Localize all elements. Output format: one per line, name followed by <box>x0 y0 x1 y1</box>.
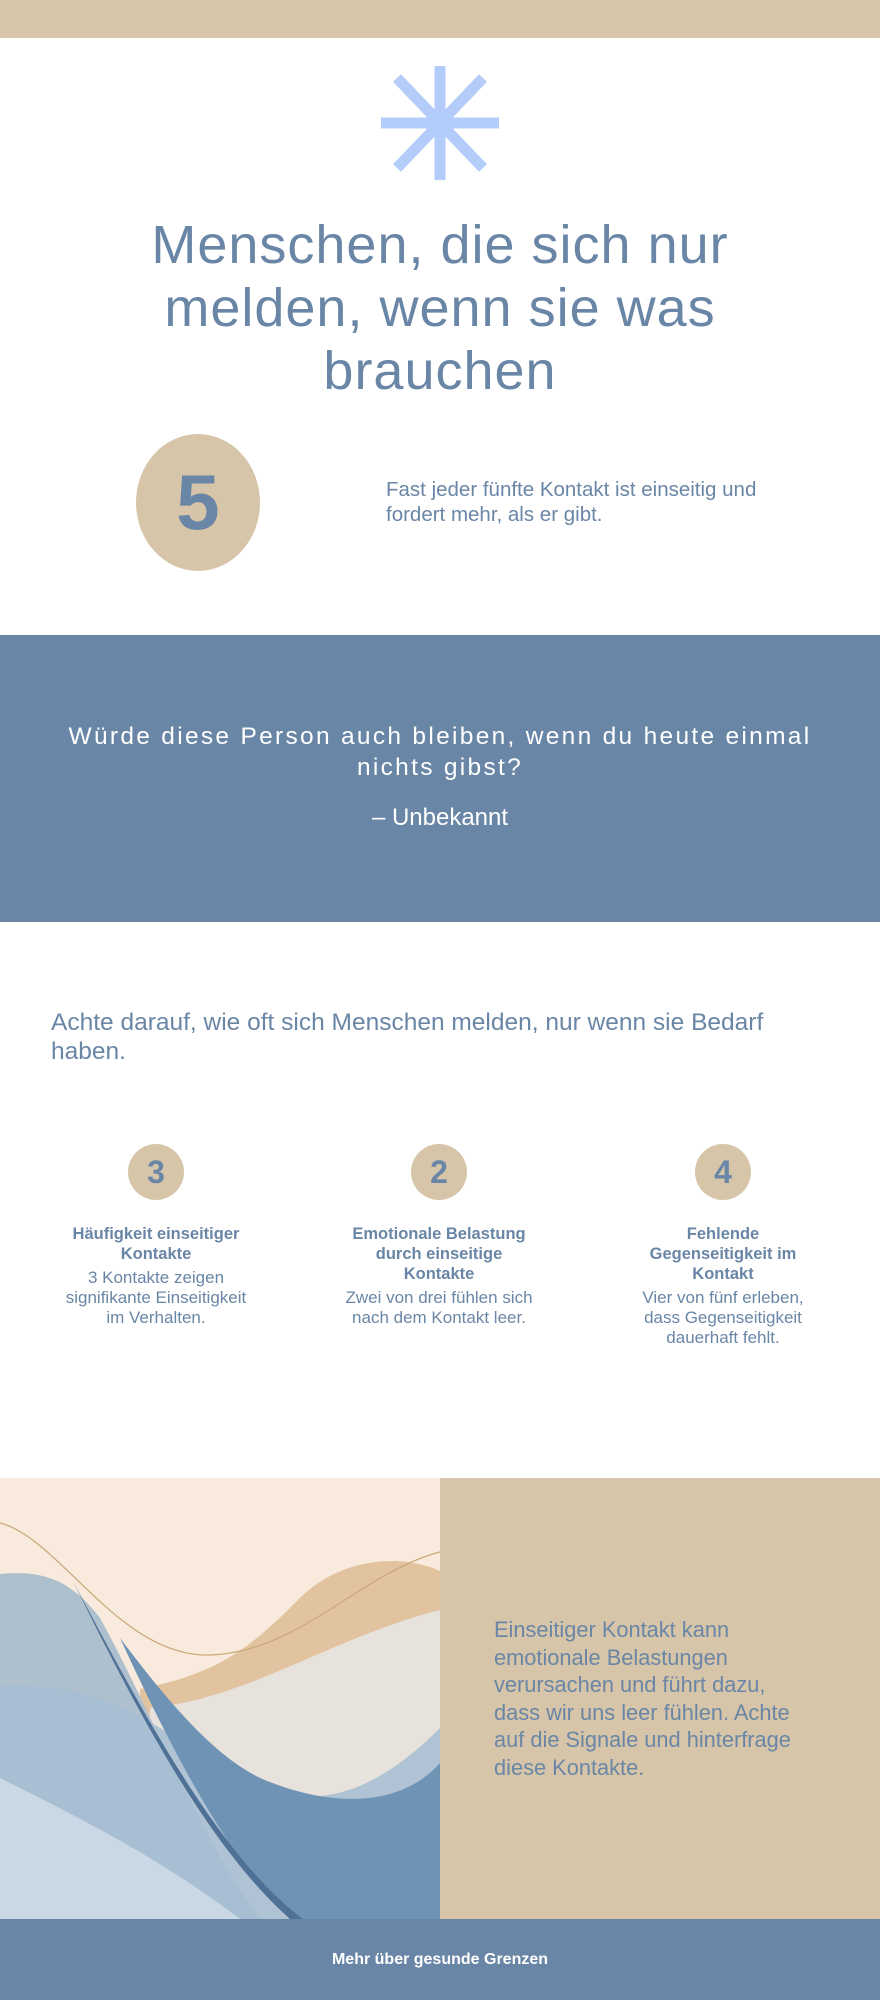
stat 2: Kontakte <box>404 1265 474 1283</box>
icon: asterisk <box>381 66 499 180</box>
stat 3 <box>642 1144 804 1347</box>
stat 2: durch einseitige <box>376 1245 502 1263</box>
stat 1: 3 <box>147 1154 165 1190</box>
illustration: abstract waves <box>0 1478 440 1919</box>
quote author: – Unbekannt <box>372 804 508 831</box>
title: melden, wenn sie was <box>164 278 716 338</box>
quote text: Würde diese Person auch bleiben, wenn du heute einmal <box>69 723 811 750</box>
closing text panel <box>440 1478 880 1919</box>
stat text: fordert mehr, als er gibt. <box>386 503 602 526</box>
stat 3: Gegenseitigkeit im <box>650 1245 796 1263</box>
title: brauchen <box>323 341 557 401</box>
stat 3: Kontakt <box>692 1265 754 1283</box>
closing text: diese Kontakte. <box>494 1754 644 1780</box>
stat 1: Häufigkeit einseitiger <box>73 1225 239 1243</box>
title: Menschen, die sich nur <box>151 215 729 275</box>
closing text: verursachen und führt dazu, <box>494 1672 765 1697</box>
stat 1 <box>66 1144 246 1327</box>
stat 3: dass Gegenseitigkeit <box>644 1308 802 1327</box>
closing text: auf die Signale und hinterfrage <box>494 1727 791 1752</box>
stat 3: dauerhaft fehlt. <box>666 1328 780 1347</box>
closing text: emotionale Belastungen <box>494 1644 728 1670</box>
stat oval: 5: 5 <box>176 458 220 546</box>
stat 2: 2 <box>430 1154 448 1190</box>
closing text: dass wir uns leer fühlen. Achte <box>494 1700 790 1724</box>
intro text: Achte darauf, wie oft sich Menschen melden, nur wenn sie Bedarf <box>51 1009 763 1036</box>
stats row <box>66 1144 804 1347</box>
title <box>151 215 729 401</box>
top bar <box>0 0 880 38</box>
quote text <box>68 723 811 781</box>
stat text <box>386 478 756 526</box>
stat 3: Fehlende <box>687 1225 759 1243</box>
closing text: Einseitiger Kontakt kann <box>494 1617 729 1642</box>
stat 1: signifikante Einseitigkeit <box>66 1288 246 1307</box>
stat 3: 4 <box>714 1154 732 1190</box>
quote text: nichts gibst? <box>357 754 523 781</box>
stat 1: Kontakte <box>121 1245 191 1263</box>
footer <box>0 1919 880 2000</box>
stat 1: 3 Kontakte zeigen <box>88 1268 224 1287</box>
footer: Mehr über gesunde Grenzen <box>332 1951 548 1968</box>
quote band <box>0 635 880 922</box>
stat 3: Vier von fünf erleben, <box>642 1288 804 1307</box>
stat text: Fast jeder fünfte Kontakt ist einseitig und <box>386 478 756 501</box>
intro text: haben. <box>51 1038 126 1065</box>
stat 2: Zwei von drei fühlen sich <box>345 1288 533 1307</box>
stat 2: Emotionale Belastung <box>352 1225 526 1243</box>
closing text <box>494 1617 791 1780</box>
intro text <box>51 1009 764 1065</box>
stat 2: nach dem Kontakt leer. <box>352 1308 526 1327</box>
stat oval: 5 <box>136 434 260 571</box>
stat 2 <box>345 1144 533 1327</box>
stat 1: im Verhalten. <box>106 1308 206 1327</box>
